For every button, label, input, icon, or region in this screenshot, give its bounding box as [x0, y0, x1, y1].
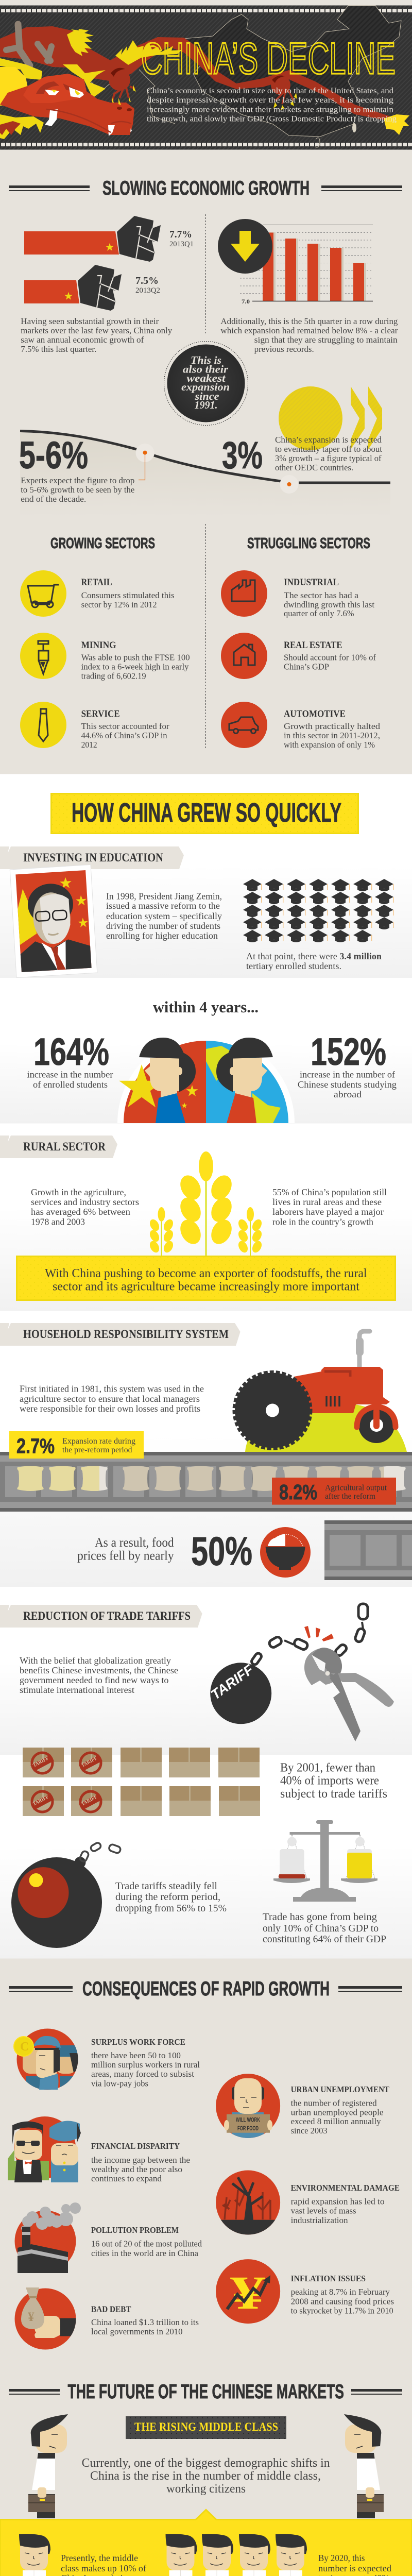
consequence: urban unemployment: WILL WORK: [236, 2116, 260, 2124]
sector: retail: RETAIL: [81, 578, 112, 588]
fist bar 2013Q1: [24, 216, 194, 262]
student right: [216, 1038, 273, 1123]
sector: retail: sector by 12% in 2012: [81, 600, 157, 609]
consequence: inflation issues: [216, 2259, 394, 2324]
text: rural growth: has averaged 6% between: [31, 1207, 130, 1217]
stat: 3%: 3%: [222, 434, 263, 477]
stat: 3%: 3% growth – a figure typical of: [275, 453, 382, 463]
sector: retail: Consumers stimulated this: [81, 590, 175, 600]
text: imports subject to tariffs: [280, 1761, 387, 1801]
text: globalization: With the belief that globalization greatly: [20, 1655, 171, 1666]
ribbon: household responsibility system: HOUSEHOLD RESPONSIBILITY SYSTEM: [23, 1328, 229, 1341]
consequence: environmental damage: rapid expansion has led to: [291, 2197, 385, 2207]
text: rural growth: 1978 and 2003: [31, 1217, 85, 1227]
heading: growing sectors: GROWING SECTORS: [50, 535, 155, 552]
text: rural population: lives in rural areas and these: [272, 1197, 382, 1207]
consequence: urban unemployment: URBAN UNEMPLOYMENT: [291, 2084, 390, 2094]
icon: bolt cutters: [304, 1648, 394, 1741]
stat: 3%: China’s expansion is expected: [275, 435, 382, 445]
stat: 164%: 164%: [33, 1030, 109, 1073]
heading banner: how China grew so quickly: [52, 793, 358, 834]
illustration: tractor: [234, 1331, 407, 1452]
text: demographic shift: China is the rise in the number of middle class,: [90, 2469, 321, 2483]
stat: 152%: [298, 1030, 397, 1099]
ribbon: rural sector: RURAL SECTOR: [23, 1140, 106, 1154]
consequence: urban unemployment: urban unemployed people: [291, 2108, 384, 2117]
illustration: conveyor belt with sacks: [0, 1452, 412, 1512]
panel: middle class projection: [0, 2510, 412, 2576]
consequence: surplus work force: C: [20, 2040, 29, 2054]
illustration: tariff ball and chain: [208, 1604, 394, 1741]
text: household system: agriculture sector to ensure that local managers: [20, 1394, 200, 1404]
panel: header banner: [0, 5, 412, 149]
consequence: financial disparity: wealthy and the poor also: [91, 2164, 182, 2174]
stat box: 8.2%: Agricultural output: [325, 1483, 387, 1492]
stat: 164%: increase in the number: [27, 1070, 113, 1080]
text: tariffs fell: dropping from 56% to 15%: [115, 1903, 227, 1914]
sector: mining: [20, 633, 190, 681]
illustration: tariff ball and chain: TARIFF: [208, 1661, 257, 1703]
text: imports subject to tariffs: subject to trade tariffs: [280, 1787, 387, 1801]
text: middle class 2020: number is expected: [318, 2563, 391, 2573]
fist bar 2013Q2: 2013Q2: [135, 286, 160, 295]
figure: businessman left: [28, 2414, 68, 2518]
text: globalization: benefits Chinese investments, the Chinese: [20, 1665, 178, 1675]
ribbon: rural sector: [0, 1136, 117, 1158]
stamp: tariff 4: [79, 1791, 102, 1812]
consequence: pollution problem: [14, 2202, 202, 2273]
stat box: 2.7%: [9, 1431, 144, 1459]
text: imports subject to tariffs: By 2001, fewer than: [280, 1761, 375, 1774]
callout: weakest expansion: This is: [191, 354, 221, 366]
text: globalization: [20, 1655, 178, 1695]
ribbon: household responsibility system: [0, 1323, 241, 1346]
stamp: tariff 2: TARIFF: [80, 1755, 98, 1769]
callout: weakest expansion: since: [194, 390, 219, 402]
stat: food prices 50%: 50%: [191, 1529, 252, 1574]
text: middle class today: Presently, the middle: [61, 2553, 138, 2563]
ribbon: reduction of trade tariffs: [0, 1605, 202, 1628]
illustration: wheat: [148, 1151, 264, 1256]
intro text: increasingly more evident that their markets are struggling to maintain: [147, 105, 393, 114]
callout: exporter of foodstuffs: With China pushing to become an exporter of foodstuffs, the rural: [45, 1267, 367, 1280]
stat: 152%: Chinese students studying: [298, 1079, 397, 1090]
figure: businessman right: [344, 2414, 384, 2518]
banner: the rising middle class: [126, 2416, 286, 2439]
sector: service: 44.6% of China’s GDP in: [81, 731, 167, 740]
text: fifth quarter: sign that they are struggling to maintain: [254, 335, 398, 345]
consequence: surplus work force: via low-pay jobs: [91, 2078, 148, 2089]
text: tertiary students: [246, 951, 382, 971]
text: household system: were responsible for their own losses and profits: [20, 1403, 200, 1414]
text: rural population: 55% of China’s population still: [272, 1187, 387, 1197]
consequence: urban unemployment: FOR FOOD: [237, 2125, 259, 2132]
panel: the future of the Chinese markets: [0, 2381, 412, 2576]
intro text: China’s economy is second in size only to that of the United States, and: [147, 87, 393, 95]
stat: 152%: abroad: [334, 1089, 362, 1099]
sector: real estate: Should account for 10% of: [284, 653, 376, 663]
stamp: tariff 2: [79, 1753, 102, 1773]
stat: food prices 50%: [77, 1527, 311, 1578]
text: fifth quarter: [220, 316, 398, 354]
text: globalization: government needed to find new ways to: [20, 1675, 169, 1685]
panel: how China grew background: [0, 774, 412, 1959]
sector: real estate: REAL ESTATE: [284, 640, 342, 651]
bar chart: quarterly GDP growth: 7.0: [242, 298, 250, 305]
consequence: urban unemployment: since 2003: [291, 2126, 328, 2136]
stat: food prices 50%: As a result, food: [95, 1536, 174, 1550]
fist bar 2013Q1: 2013Q1: [169, 240, 194, 248]
stat: 5-6%: Experts expect the figure to drop: [21, 476, 134, 485]
text: education reform: [106, 891, 222, 941]
fist bar 2013Q2: [24, 265, 160, 311]
text: household system: First initiated in 1981, this system was used in the: [20, 1384, 204, 1394]
consequence: financial disparity: FINANCIAL DISPARITY: [91, 2141, 180, 2151]
intro text: despite impressive growth over the last few years, it is becoming: [147, 96, 393, 105]
stat box: 8.2%: [272, 1478, 396, 1505]
text: rural growth: Growth in the agriculture,: [31, 1187, 126, 1197]
stamp: tariff 1: [30, 1753, 54, 1773]
text: rural growth: services and industry sectors: [31, 1197, 139, 1207]
text: rural population: laborers have played a major: [272, 1207, 384, 1217]
sector: real estate: [221, 633, 376, 679]
bar chart: quarterly GDP growth: [218, 219, 373, 305]
stat: 152%: increase in the number of: [300, 1070, 395, 1080]
text: trade share of GDP: constituting 64% of their GDP: [263, 1934, 386, 1945]
ribbon: reduction of trade tariffs: REDUCTION OF TRADE TARIFFS: [23, 1609, 191, 1623]
callout: weakest expansion: 1991.: [195, 399, 217, 411]
stat box: 8.2%: 8.2%: [279, 1480, 317, 1504]
stat: 3%: [222, 434, 382, 477]
sector: mining: Was able to push the FTSE 100: [81, 653, 190, 663]
stat: food prices 50%: prices fell by nearly: [77, 1549, 174, 1563]
stat: 164%: of enrolled students: [33, 1079, 108, 1090]
ribbon: investing in education: [0, 846, 184, 869]
consequence: financial disparity: [8, 2116, 190, 2183]
stat: 3%: other OEDC countries.: [275, 463, 353, 472]
text: demographic shift: Currently, one of the biggest demographic shifts in: [82, 2456, 330, 2470]
portrait: Jiang Zemin polaroid: [10, 865, 97, 978]
callout: weakest expansion: [164, 341, 248, 426]
sector: industrial: INDUSTRIAL: [284, 578, 339, 588]
text: imports subject to tariffs: 40% of imports were: [280, 1774, 379, 1788]
text: tariffs fell: Trade tariffs steadily fell: [115, 1880, 217, 1892]
consequence: inflation issues: ¥: [230, 2266, 265, 2319]
text: education reform: driving the number of students: [106, 921, 220, 931]
sector: mining: index to a 6-week high in early: [81, 662, 189, 672]
text: trade share of GDP: [263, 1911, 386, 1945]
consequence: pollution problem: 16 out of 20 of the most polluted: [91, 2239, 202, 2249]
text: middle class 2020: [318, 2553, 391, 2576]
text: fifth quarter: previous records.: [254, 344, 314, 354]
consequence: surplus work force: areas, many forced to subsist: [91, 2069, 194, 2079]
text: middle class today: class makes up 10% of: [61, 2563, 146, 2573]
callout: exporter of foodstuffs: [16, 1256, 396, 1300]
stat: 5-6%: to 5-6% growth to be seen by the: [21, 485, 134, 495]
consequence: surplus work force: [14, 2029, 200, 2092]
stat: 5-6%: 5-6%: [19, 434, 88, 477]
stat: 5-6%: [19, 434, 134, 504]
consequence: bad debt: [14, 2287, 199, 2349]
text: annual growth: 7.5% this last quarter.: [21, 344, 96, 354]
illustration: tariff ball with percentage slice: [11, 1842, 121, 1948]
text: education reform: enrolling for higher education: [106, 930, 218, 941]
chart: projected growth curve: [20, 431, 390, 517]
consequence: pollution problem: POLLUTION PROBLEM: [91, 2225, 179, 2235]
callout: weakest expansion: expansion: [181, 381, 230, 393]
text: fifth quarter: which expansion had remained below 8% - a clear: [220, 326, 398, 335]
text: tertiary students: At that point, there were 3.4 million: [246, 951, 382, 961]
consequence: urban unemployment: the number of registered: [291, 2098, 377, 2108]
text: household system: [20, 1384, 204, 1414]
map of China outline: [53, 6, 401, 147]
consequence: surplus work force: SURPLUS WORK FORCE: [91, 2037, 185, 2047]
stamp: tariff 4: TARIFF: [80, 1794, 98, 1807]
stat: 3%: to eventually taper off to about: [275, 444, 382, 454]
sector: industrial: dwindling growth this last: [284, 600, 374, 609]
heading: within 4 years: within 4 years...: [153, 998, 259, 1016]
text: demographic shift: [82, 2456, 330, 2496]
panel: struggling sectors: [221, 535, 381, 750]
callout: exporter of foodstuffs: sector and its agriculture became increasingly more important: [53, 1280, 359, 1293]
stamp: tariff 1: TARIFF: [32, 1755, 50, 1769]
icon grid: graduation caps: [243, 879, 393, 942]
text: annual growth: saw an annual economic growth of: [21, 335, 144, 345]
fist bar 2013Q1: 7.7%: [169, 229, 192, 240]
sector: industrial: [221, 570, 374, 618]
panel: growing sectors: [20, 535, 190, 750]
consequence: financial disparity: continues to expand: [91, 2174, 162, 2183]
sector: mining: MINING: [81, 640, 116, 651]
text: rural population: role in the country’s growth: [272, 1217, 373, 1227]
fist bar 2013Q2: 7.5%: [135, 275, 159, 286]
text: globalization: stimulate international interest: [20, 1685, 134, 1695]
sector: retail: [20, 570, 175, 617]
sector: automotive: [221, 702, 381, 750]
text: middle class today: [61, 2553, 146, 2576]
consequence: urban unemployment: exceed 8 million annually: [291, 2116, 381, 2126]
sector: automotive: AUTOMOTIVE: [284, 709, 346, 719]
text: annual growth: [21, 316, 173, 354]
sector: automotive: Growth practically halted: [284, 721, 381, 731]
consequence: environmental damage: vast levels of mass: [291, 2206, 356, 2216]
consequence: environmental damage: industrialization: [291, 2215, 348, 2225]
consequence: bad debt: China loaned $1.3 trillion to its: [91, 2317, 199, 2327]
intro text: this growth, and slowly their GDP (Gross Domestic Product) is dropping: [147, 114, 397, 124]
icon: down arrow: [218, 219, 272, 274]
conveyor belt: continuation: [324, 1520, 412, 1580]
callout: weakest expansion: weakest: [186, 372, 226, 384]
sector: service: [20, 702, 169, 750]
intro text: [147, 87, 397, 124]
dragon illustration: [0, 24, 409, 139]
text: tertiary students: tertiary enrolled students.: [246, 961, 341, 971]
stat box: 2.7%: 2.7%: [16, 1434, 55, 1458]
stamp: tariff 3: [30, 1791, 54, 1812]
text: education reform: In 1998, President Jiang Zemin,: [106, 891, 222, 902]
text: education reform: education system – specifically: [106, 911, 222, 921]
text: fifth quarter: Additionally, this is the 5th quarter in a row during: [220, 316, 398, 326]
stat: 164%: [27, 1030, 113, 1090]
sector: real estate: China’s GDP: [284, 662, 329, 672]
sector: automotive: with expansion of only 1%: [284, 740, 375, 750]
consequence: environmental damage: ENVIRONMENTAL DAMAGE: [291, 2183, 400, 2193]
consequence: surplus work force: million surplus workers in rural: [91, 2060, 200, 2070]
consequence: inflation issues: 2008 and causing food prices: [291, 2296, 394, 2306]
text: trade share of GDP: Trade has gone from being: [263, 1911, 377, 1923]
figures: 40% middle class: [166, 2534, 307, 2576]
stat box: 2.7%: Expansion rate during: [62, 1437, 135, 1446]
icon: rice bowl: [260, 1527, 311, 1578]
consequence: inflation issues: peaking at 8.7% in February: [291, 2287, 390, 2297]
consequence: bad debt: ¥: [28, 2310, 35, 2324]
text: annual growth: markets over the last few years, China only: [21, 326, 173, 335]
sector: service: This sector accounted for: [81, 721, 169, 731]
text: annual growth: Having seen substantial growth in their: [21, 316, 159, 326]
text: trade share of GDP: only 10% of China’s GDP to: [263, 1923, 379, 1934]
text: rural population: [272, 1187, 387, 1227]
consequence: inflation issues: to skyrocket by 11.7% in 2010: [291, 2306, 393, 2315]
banner: the rising middle class: THE RISING MIDDLE CLASS: [134, 2420, 278, 2433]
consequence: urban unemployment: [216, 2074, 390, 2138]
text: tariffs fell: [115, 1880, 227, 1914]
sector: industrial: quarter of only 7.6%: [284, 608, 354, 618]
ribbon: investing in education: INVESTING IN EDUCATION: [23, 851, 163, 865]
sector: service: SERVICE: [81, 709, 120, 719]
consequence: environmental damage: [215, 2170, 400, 2235]
text: education reform: issued a massive reform to the: [106, 901, 220, 911]
sector: mining: trading of 6,602.19: [81, 671, 146, 681]
sector: automotive: in this sector in 2011-2012,: [284, 731, 380, 740]
sector: industrial: The sector has had a: [284, 590, 359, 600]
callout: weakest expansion: also their: [183, 363, 229, 376]
stat box: 2.7%: the pre-reform period: [62, 1446, 132, 1454]
stat: 5-6%: end of the decade.: [21, 494, 86, 504]
sector: service: 2012: [81, 740, 97, 750]
consequence: inflation issues: INFLATION ISSUES: [291, 2274, 366, 2283]
text: demographic shift: working citizens: [166, 2482, 246, 2496]
text: rural growth: [31, 1187, 139, 1227]
text: middle class 2020: By 2020, this: [318, 2553, 365, 2563]
heading: slowing economic growth: SLOWING ECONOMIC GROWTH: [102, 177, 310, 199]
student left: [139, 1038, 196, 1123]
illustration: students and world: [117, 1035, 295, 1123]
panel: consequences: [8, 1981, 402, 2349]
stat: 152%: 152%: [311, 1030, 386, 1073]
consequence: surplus work force: there have been 50 to 100: [91, 2050, 181, 2060]
stamp: tariff 3: TARIFF: [32, 1794, 50, 1807]
consequence: bad debt: local governments in 2010: [91, 2327, 182, 2336]
consequence: financial disparity: the income gap between the: [91, 2155, 190, 2165]
boxes: imports with tariffs: [23, 1748, 260, 1816]
consequence: bad debt: BAD DEBT: [91, 2304, 131, 2314]
icon: yellow circle and chevrons: [279, 386, 382, 450]
figure: 10% middle class: [19, 2534, 50, 2576]
illustration: scales: [273, 1820, 377, 1902]
consequence: pollution problem: cities in the world are in China: [91, 2248, 199, 2258]
stat box: 8.2%: after the reform: [325, 1492, 375, 1501]
text: tariffs fell: during the reform period,: [115, 1891, 220, 1903]
